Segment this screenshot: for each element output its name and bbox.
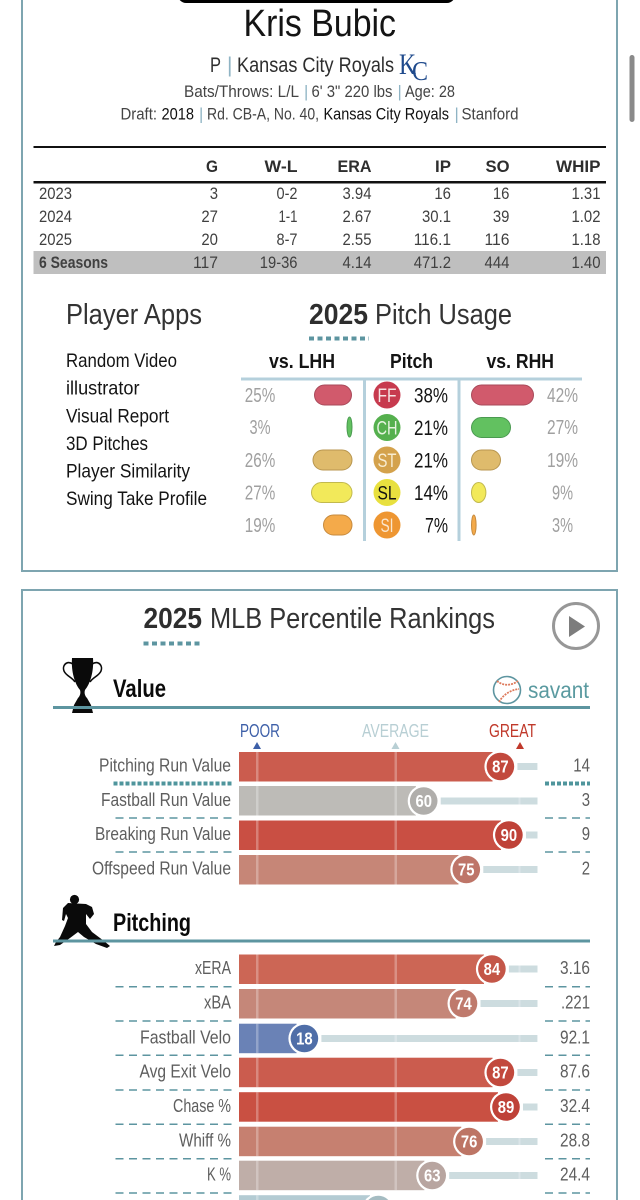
value heading: Value [113, 675, 166, 703]
draft line [120, 106, 518, 124]
row: Fastball Run Value: 3 [582, 790, 590, 810]
scale legend: POOR [240, 721, 280, 741]
row: Fastball Velo [116, 1022, 590, 1055]
card border [22, 590, 617, 1200]
row 6 seasons: 471.2 [414, 253, 451, 272]
player name: Kris Bubic [244, 3, 396, 45]
row 2024 [39, 207, 600, 226]
row FF: 38% [414, 384, 448, 408]
card border [22, 0, 617, 571]
row 2024: 2.67 [342, 207, 372, 226]
row 6 seasons: 6 Seasons [39, 253, 108, 272]
panel: player card [22, 0, 617, 571]
row: K %: K % [207, 1164, 231, 1184]
row 6 seasons: 4.14 [342, 253, 372, 272]
row FF [245, 382, 578, 408]
row: xERA: 84 [484, 959, 500, 979]
bio line: Bats/Throws: L/L [184, 83, 299, 101]
row 2024: 1.02 [572, 207, 600, 226]
row: Avg Exit Velo: 87.6 [560, 1062, 590, 1082]
row 2025: 116.1 [414, 230, 451, 249]
row: K %: 24.4 [560, 1164, 590, 1184]
row 2023: 2023 [39, 184, 72, 203]
row: Fastball Velo: 18 [296, 1029, 313, 1049]
row CH [250, 414, 578, 441]
row: Offspeed Run Value: 2 [582, 858, 590, 878]
draft line: Rd. CB-A, No. 40, [207, 106, 319, 124]
player apps heading: Player Apps [66, 299, 202, 331]
icon: KC logo [399, 48, 428, 86]
row ST: 21% [414, 450, 448, 472]
row 2025: 20 [201, 230, 218, 249]
bio line: Age: 28 [405, 83, 455, 101]
row CH: CH [376, 418, 398, 440]
player apps list: Swing Take Profile [66, 488, 207, 510]
icon: play button [554, 604, 598, 648]
row 6 seasons: 19-36 [260, 253, 298, 272]
row: Pitching Run Value: 14 [573, 756, 590, 776]
pitch usage table [241, 351, 582, 541]
row SL: 9% [552, 482, 573, 504]
table header: G [206, 157, 218, 176]
rankings title: MLB Percentile Rankings [210, 603, 495, 635]
row 2024: 27 [201, 207, 218, 226]
table header: ERA [338, 157, 372, 176]
icon: pitcher silhouette [54, 895, 110, 948]
row: xBA: 74 [455, 994, 472, 1014]
row: Avg Exit Velo: Avg Exit Velo [140, 1062, 231, 1082]
row: Whiff %: 28.8 [560, 1130, 590, 1150]
row SL: 14% [414, 482, 448, 505]
table header: SO [486, 157, 510, 176]
row 2024: 2024 [39, 207, 72, 226]
row: Whiff % [116, 1126, 590, 1159]
row 6 seasons: 117 [193, 253, 218, 272]
table header: WHIP [556, 157, 600, 176]
row FF: FF [378, 386, 396, 407]
draft line: | [199, 106, 203, 124]
table header: IP [435, 157, 451, 176]
row FF: 25% [245, 385, 275, 407]
row 2023: 16 [434, 184, 451, 203]
row CH: 27% [547, 417, 578, 439]
row: Pitching Run Value [99, 750, 590, 784]
player apps list: Visual Report [66, 406, 170, 428]
rankings title: 2025 [144, 603, 202, 635]
row: Offspeed Run Value: Offspeed Run Value [92, 858, 231, 878]
bio line: | [398, 83, 402, 101]
pitch usage heading: Pitch Usage [375, 299, 512, 331]
row: xERA: 3.16 [560, 958, 590, 978]
icon: savant baseball [494, 676, 520, 704]
row: Breaking Run Value: Breaking Run Value [95, 824, 231, 844]
scrollbar [630, 55, 634, 122]
draft line: Kansas City Royals [324, 106, 449, 124]
row: Offspeed Run Value [92, 854, 590, 886]
savant label: savant [528, 677, 590, 703]
row 2025: 116 [484, 230, 510, 249]
row: Chase %: 89 [498, 1097, 514, 1117]
row 2024: 30.1 [422, 207, 451, 226]
row CH: 3% [250, 417, 271, 439]
draft line: Draft: [120, 106, 157, 124]
row: Breaking Run Value [95, 819, 590, 852]
scale legend: GREAT [489, 721, 536, 741]
bio line [184, 83, 455, 101]
row: Whiff %: 76 [461, 1132, 478, 1152]
column headers: vs. RHH [486, 351, 554, 373]
row 2025: 1.18 [572, 230, 600, 249]
row 6 seasons: 1.40 [572, 253, 600, 272]
row 2025: 2025 [39, 230, 72, 249]
row 2023: 3.94 [342, 184, 372, 203]
row SI: 3% [552, 515, 573, 537]
icon: trophy [63, 658, 102, 713]
row: Fastball Run Value: Fastball Run Value [101, 790, 231, 810]
row: Fastball Velo: 92.1 [560, 1028, 590, 1048]
icon: KC logo: C [412, 56, 428, 86]
row SI: 7% [425, 514, 448, 538]
row: Avg Exit Velo: 87 [492, 1063, 509, 1083]
pitching heading: Pitching [113, 909, 191, 937]
row SI [245, 512, 573, 538]
row 2025 [39, 230, 600, 249]
row: K %: 63 [424, 1166, 441, 1186]
row 2024: 1-1 [278, 207, 298, 226]
section: pitching [53, 895, 590, 1200]
row: Chase %: Chase % [173, 1096, 231, 1116]
row: Pitching Run Value: 87 [492, 757, 509, 777]
row: xBA: .221 [561, 992, 590, 1012]
position and team: P [210, 54, 221, 77]
row: Fastball Run Value [101, 785, 590, 818]
player apps list: 3D Pitches [66, 433, 148, 455]
row: Breaking Run Value: 9 [582, 824, 590, 844]
column headers: Pitch [390, 351, 433, 373]
row SL: SL [378, 484, 396, 504]
row 2023: 0-2 [276, 184, 298, 203]
row ST [245, 446, 578, 474]
row 2023: 3 [210, 184, 218, 203]
table header [206, 157, 600, 176]
row: partially visible next bar [239, 1194, 397, 1200]
row: xBA: xBA [204, 992, 231, 1012]
row ST: ST [378, 451, 397, 472]
row: xBA [116, 988, 590, 1021]
player apps list: Random Video [66, 350, 177, 372]
draft line: | [454, 106, 459, 124]
row: Chase %: 32.4 [560, 1096, 590, 1116]
row ST: 19% [547, 450, 578, 472]
pitch usage heading [309, 299, 512, 338]
row SL: 27% [245, 482, 275, 504]
row 2025: 2.55 [342, 230, 372, 249]
position and team: | [227, 54, 232, 77]
row 2023: 16 [493, 184, 510, 203]
row SI: SI [380, 516, 394, 537]
row: Chase % [116, 1091, 590, 1124]
position and team: Kansas City Royals [237, 54, 394, 77]
bio line: 6' 3" 220 lbs [312, 83, 392, 101]
rankings title [144, 603, 495, 644]
scale legend: AVERAGE [362, 721, 429, 741]
row 2023 [39, 184, 600, 203]
draft line: Stanford [462, 106, 518, 124]
row 2023: 1.31 [572, 184, 600, 203]
top black pill [178, 0, 455, 3]
panel: percentile rankings [22, 590, 617, 1200]
row 6 seasons: 444 [484, 253, 510, 272]
row CH: 21% [414, 417, 448, 440]
row: xERA [116, 953, 590, 987]
table header: W-L [264, 157, 298, 176]
row FF: 42% [547, 385, 578, 407]
row: Whiff %: Whiff % [179, 1130, 231, 1150]
draft line: 2018 [162, 106, 194, 124]
row 2024: 39 [493, 207, 510, 226]
player apps list: Player Similarity [66, 460, 190, 482]
scale legend [240, 721, 536, 749]
row: K % [116, 1160, 590, 1193]
player apps list [66, 350, 207, 510]
row: Fastball Velo: Fastball Velo [140, 1028, 231, 1048]
section: value [53, 658, 590, 886]
icon: KC logo: K [399, 48, 416, 81]
row: Breaking Run Value: 90 [501, 825, 517, 845]
player apps list: illustrator [66, 378, 140, 400]
row 2025: 8-7 [276, 230, 298, 249]
pitch usage heading: 2025 [309, 299, 368, 331]
row: Offspeed Run Value: 75 [458, 860, 475, 880]
row 6 seasons [39, 253, 600, 272]
column headers [269, 351, 554, 373]
row SI: 19% [245, 515, 275, 537]
row: Pitching Run Value: Pitching Run Value [99, 756, 231, 776]
bio line: | [304, 83, 308, 101]
row: Fastball Run Value: 60 [415, 791, 432, 811]
row ST: 26% [245, 450, 275, 472]
stats table [34, 146, 606, 274]
row: Avg Exit Velo [116, 1056, 590, 1090]
column headers: vs. LHH [269, 351, 335, 373]
row SL [245, 479, 573, 506]
row: xERA: xERA [195, 958, 231, 978]
